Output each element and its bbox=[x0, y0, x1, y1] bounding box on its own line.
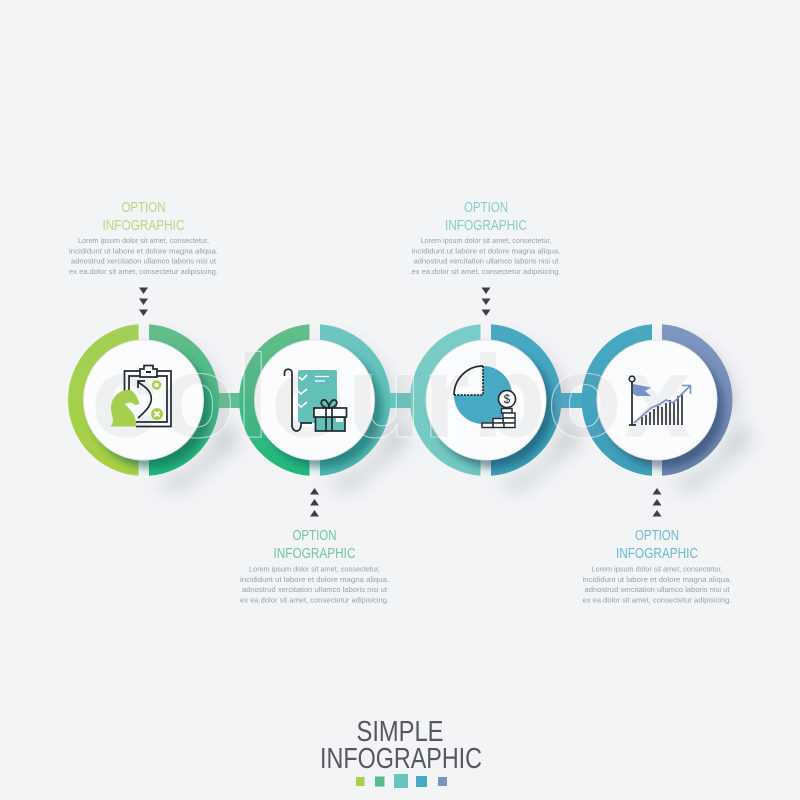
text block: option 4: incididunt ut labore et dolore magna aliqua. bbox=[582, 575, 732, 584]
watermark: colourbox bbox=[90, 331, 692, 463]
text block: option 1: ex ea.dolor sit amet, consectetur adipisicing. bbox=[69, 267, 218, 276]
ring 4 left half bbox=[582, 324, 652, 476]
heading: option 2 line 1: OPTION bbox=[292, 527, 336, 544]
title line 1: SIMPLE bbox=[356, 716, 444, 748]
ring 3 left half bbox=[410, 324, 480, 476]
text block: option 2: incididunt ut labore et dolore magna aliqua. bbox=[240, 575, 389, 584]
text block: option 1: incididunt ut labore et dolore magna aliqua. bbox=[69, 246, 218, 256]
heading: option 4 line 1: OPTION bbox=[635, 527, 679, 544]
text block: option 3: Lorem ipsum dolor sit amet, consectetur, bbox=[420, 236, 552, 245]
connector: 3 to 4 bbox=[553, 393, 589, 408]
arrows: option 4 bbox=[652, 488, 662, 516]
text block: option 4: ex ea.dolor sit amet, consectetur adipisicing. bbox=[582, 596, 732, 604]
circle 4 bbox=[582, 324, 732, 476]
circle 1 bbox=[68, 324, 219, 476]
text block: option 3: ex ea.dolor sit amet, consectetur adipisicing. bbox=[412, 267, 560, 276]
text block: option 4: adnostrud xercitation ullamco laboris nisi ut bbox=[584, 585, 730, 594]
text block: option 4 bbox=[582, 527, 732, 604]
text block: option 3 bbox=[412, 199, 560, 276]
heading: option 3 line 1: OPTION bbox=[464, 199, 508, 216]
white disc 3 bbox=[426, 340, 546, 460]
white disc 1 bbox=[84, 340, 204, 460]
connector: 1 to 2 bbox=[210, 393, 246, 408]
ring 2 right half bbox=[320, 324, 390, 476]
arrows: option 2 bbox=[310, 488, 319, 516]
text block: option 1 bbox=[69, 199, 218, 276]
text block: option 2: ex ea.dolor sit amet, consectetur adipisicing. bbox=[240, 596, 389, 604]
ring 4 right half bbox=[662, 324, 732, 476]
heading: option 3 line 2: INFOGRAPHIC bbox=[445, 217, 527, 234]
arrows: option 3 bbox=[482, 288, 490, 316]
ring 1 left half bbox=[68, 324, 138, 476]
title bbox=[320, 716, 482, 775]
text block: option 2: Lorem ipsum dolor sit amet, consectetur, bbox=[249, 564, 380, 574]
text block: option 3: adnostrud xercitation ullamco laboris nisi ut bbox=[414, 256, 559, 266]
circle 2 bbox=[239, 324, 390, 476]
circle 3 bbox=[410, 324, 561, 476]
text block: option 3: incididunt ut labore et dolore magna aliqua. bbox=[412, 246, 560, 256]
text block: option 1: Lorem ipsum dolor sit amet, consectetur, bbox=[78, 236, 209, 245]
white disc 4 bbox=[597, 340, 717, 460]
white disc 2 bbox=[254, 340, 374, 460]
icon: clipboard and chess knight bbox=[110, 366, 171, 426]
heading: option 2 line 2: INFOGRAPHIC bbox=[274, 545, 356, 562]
arrows: option 1 bbox=[139, 288, 148, 316]
legend squares bbox=[356, 774, 447, 788]
text block: option 2: adnostrud xercitation ullamco laboris nisi ut bbox=[242, 585, 388, 594]
text block: option 2 bbox=[240, 527, 389, 604]
icon: flag and growth chart bbox=[629, 376, 690, 425]
shadows under circles bbox=[150, 338, 752, 490]
icon: pie chart and coins bbox=[454, 366, 516, 428]
title line 2: INFOGRAPHIC bbox=[320, 743, 482, 775]
ring 1 right half bbox=[149, 324, 219, 476]
heading: option 1 line 2: INFOGRAPHIC bbox=[102, 217, 185, 234]
heading: option 4 line 2: INFOGRAPHIC bbox=[616, 545, 698, 562]
coin label: $ bbox=[504, 394, 511, 406]
ring 2 left half bbox=[239, 324, 310, 476]
text block: option 4: Lorem ipsum dolor sit amet, consectetur, bbox=[592, 564, 722, 574]
icon: checklist scroll and gift bbox=[284, 369, 346, 431]
text block: option 1: adnostrud xercitation ullamco laboris nisi ut bbox=[71, 256, 217, 266]
connector: 2 to 3 bbox=[382, 393, 418, 408]
heading: option 1 line 1: OPTION bbox=[122, 199, 166, 216]
ring 3 right half bbox=[491, 324, 561, 476]
